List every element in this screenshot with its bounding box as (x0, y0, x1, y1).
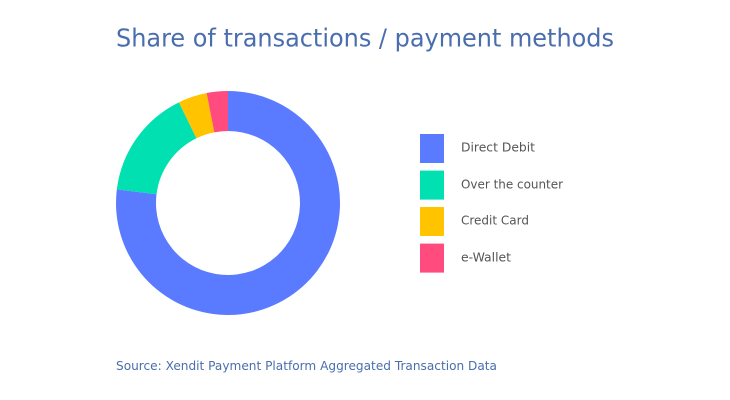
segment: Over the counter (117, 102, 196, 194)
legend item: Direct Debit (420, 134, 535, 163)
segment: Credit Card (179, 93, 214, 138)
legend item: Over the counter (420, 171, 563, 200)
legend item: e-Wallet: e-Wallet (461, 250, 511, 264)
legend (420, 134, 563, 273)
legend item: Over the counter: Over the counter (461, 178, 563, 192)
legend item: Credit Card (420, 207, 529, 236)
donut chart (116, 91, 340, 315)
legend item: Direct Debit: Direct Debit (461, 140, 535, 154)
title: Share of transactions / payment methods (116, 24, 614, 52)
legend item: Credit Card: Credit Card (461, 214, 529, 228)
segment: e-Wallet (207, 91, 228, 132)
segment: Direct Debit (116, 91, 340, 315)
source note: Source: Xendit Payment Platform Aggregated Transaction Data (116, 358, 497, 373)
legend item: e-Wallet (420, 244, 511, 273)
